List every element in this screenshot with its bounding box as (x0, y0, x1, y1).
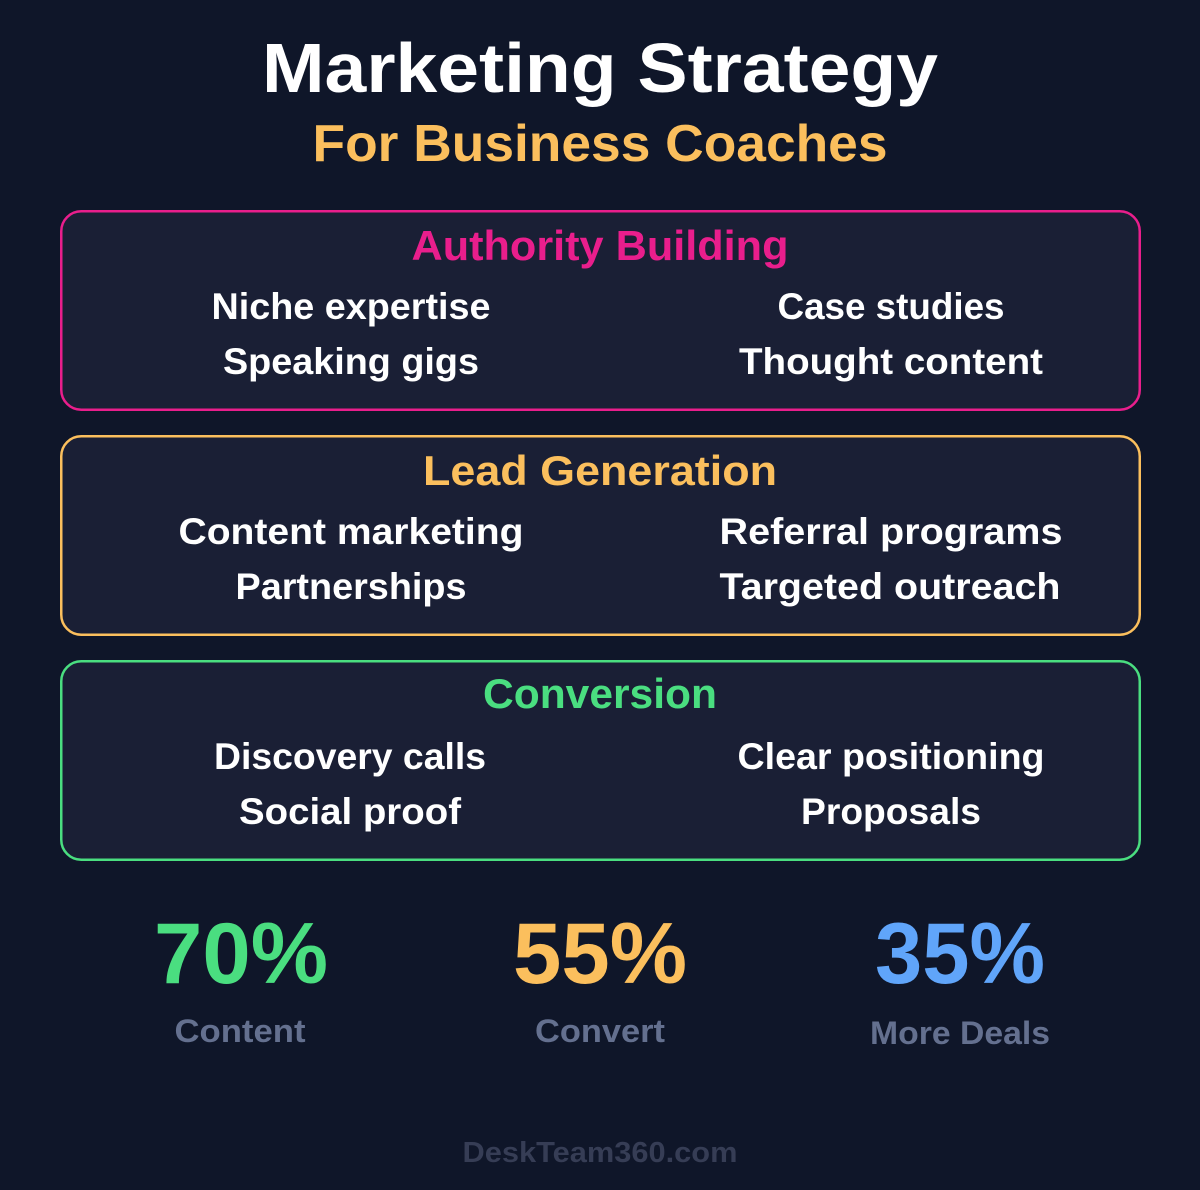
item: proposals: Proposals (801, 791, 981, 832)
stat: 70% content (154, 906, 328, 1049)
item: thought content: Thought content (739, 341, 1043, 382)
stat: 55% convert (513, 906, 687, 1049)
label: convert: Convert (535, 1013, 665, 1049)
item: social proof: Social proof (239, 791, 462, 832)
panel: authority building (61, 211, 1140, 410)
item: case studies: Case studies (778, 286, 1004, 327)
subtitle: For Business Coaches (312, 115, 888, 173)
item: clear positioning: Clear positioning (738, 736, 1044, 777)
item: discovery calls: Discovery calls (214, 736, 486, 777)
label: content: Content (174, 1013, 306, 1049)
item: content marketing: Content marketing (178, 511, 524, 552)
heading: lead generation: Lead Generation (423, 447, 777, 494)
panel: conversion (61, 661, 1140, 860)
stat: 35% more deals: 35% (875, 906, 1045, 1002)
item: partnerships: Partnerships (236, 566, 466, 607)
panel: lead generation (61, 436, 1140, 635)
label: more deals: More Deals (870, 1015, 1050, 1051)
item: referral programs: Referral programs (720, 511, 1062, 552)
item: niche expertise: Niche expertise (212, 286, 490, 327)
item: targeted outreach: Targeted outreach (720, 566, 1060, 607)
heading: authority building: Authority Building (412, 222, 788, 269)
heading: conversion: Conversion (483, 670, 717, 717)
footer: website: DeskTeam360.com (462, 1137, 738, 1169)
stat: 55% convert: 55% (513, 906, 687, 1002)
stat: 70% content: 70% (154, 906, 328, 1002)
title: Marketing Strategy (262, 29, 938, 107)
item: speaking gigs: Speaking gigs (223, 341, 479, 382)
stat: 35% more deals (870, 906, 1050, 1051)
